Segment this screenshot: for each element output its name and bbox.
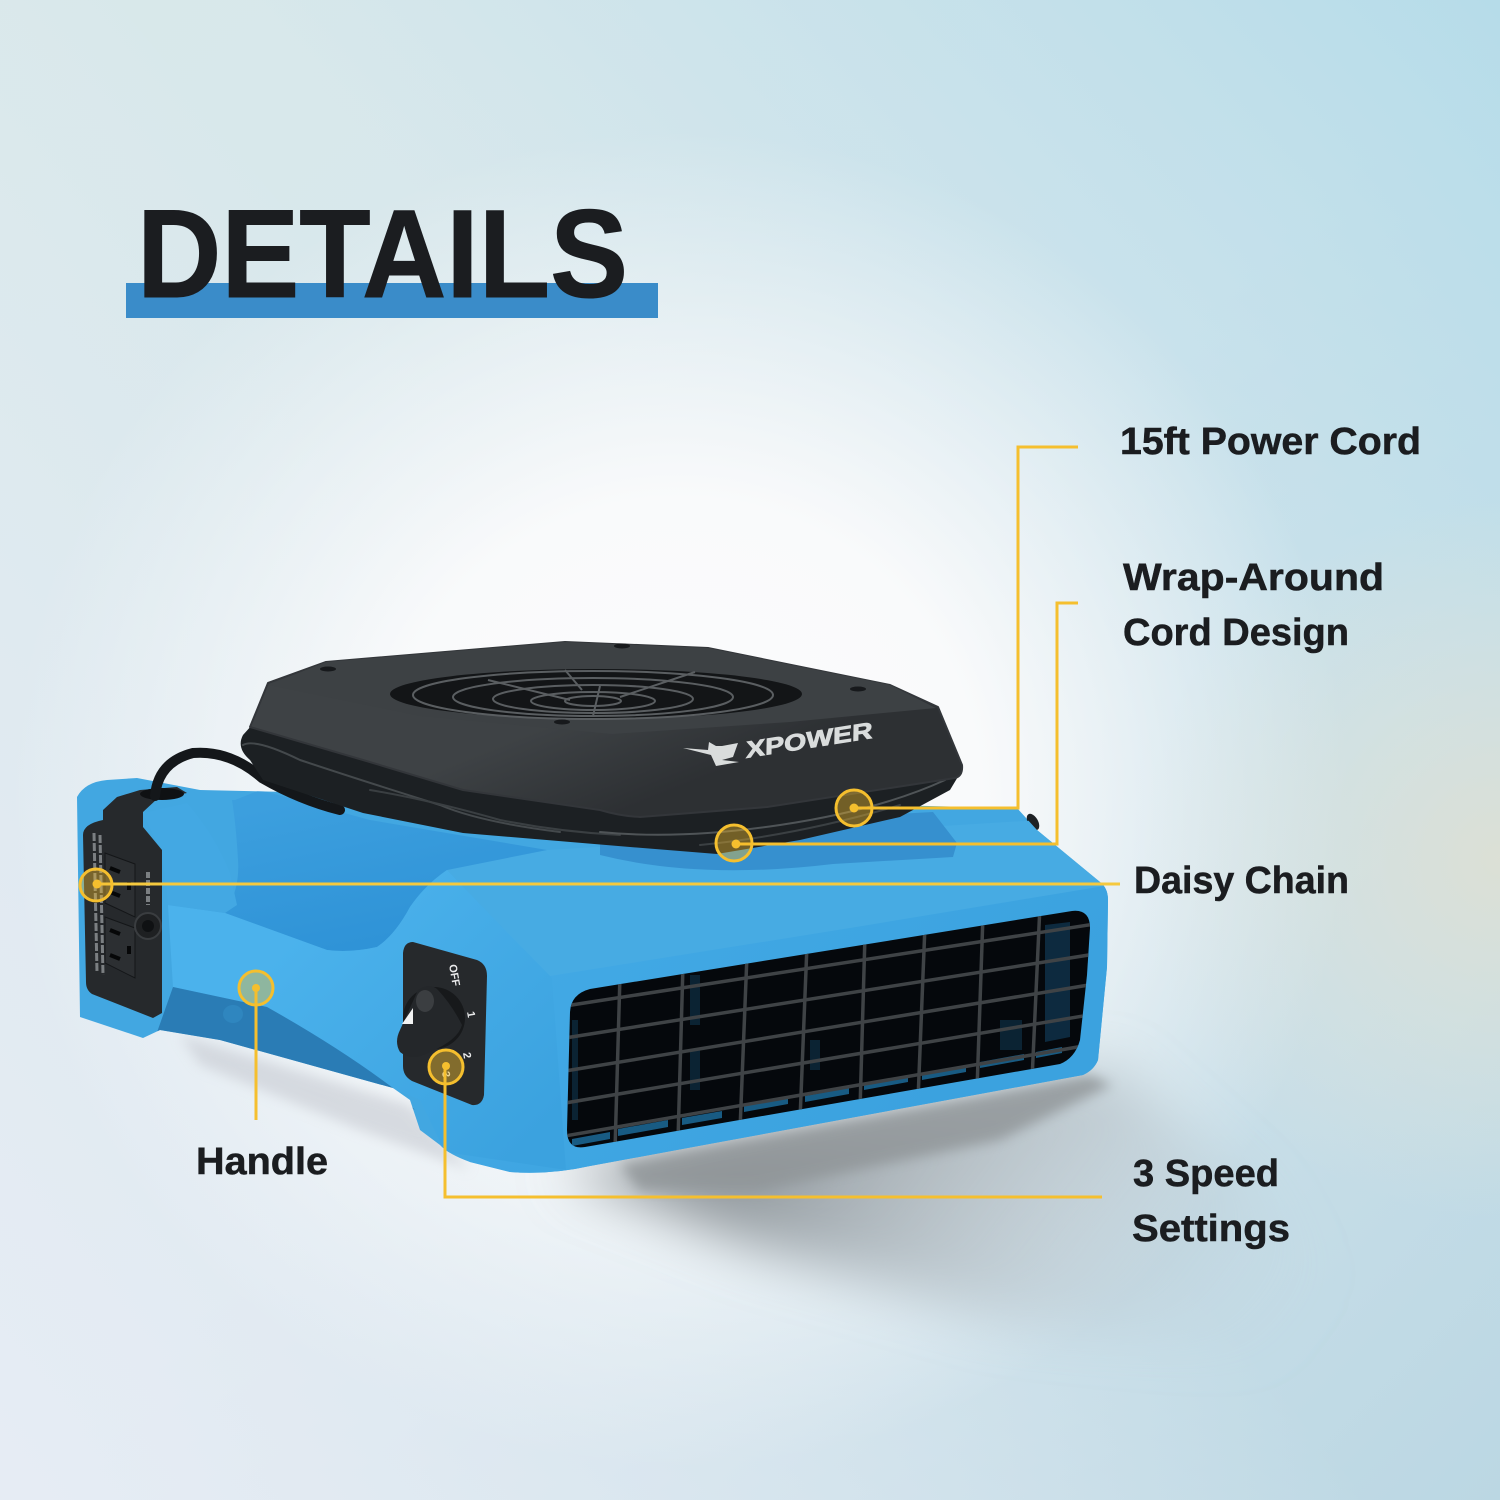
label [1132,1153,1290,1250]
wrapped power cord [155,725,962,854]
panel fine print [94,833,103,975]
cord shadow on top face [600,812,957,870]
front face [445,885,1110,1180]
outlet panel [83,787,187,1018]
left upright highlight [226,894,237,912]
label: Wrap-Around [1123,557,1384,599]
rear knob [1024,812,1042,832]
marker [716,825,752,861]
handle bar [168,870,453,1153]
callout: Handle [196,971,328,1183]
label: Handle [196,1141,328,1183]
leader line [445,1066,1102,1197]
speed dial plate: 3 [439,1070,452,1079]
label [1123,557,1384,654]
product: XPOWER air mover [77,642,1110,1180]
label: 3 Speed [1133,1153,1279,1195]
speed dial plate: 1 [464,1010,477,1019]
cord strands [243,743,945,845]
callout: Daisy Chain [80,860,1349,902]
label: Settings [1132,1208,1290,1250]
power cord inlet [140,788,184,800]
floor shadow of the product [180,1035,1390,1370]
fan opening [390,669,802,719]
marker [429,1050,463,1084]
handle recess [225,790,547,951]
speed dial plate [397,942,487,1105]
interior blue glimpses [572,1047,1062,1146]
XPOWER logo [683,717,873,766]
dial knob [397,986,462,1057]
title text: DETAILS [137,185,628,324]
blue housing [77,778,1110,1180]
mounting bump [223,1005,243,1023]
label: 15ft Power Cord [1120,421,1421,463]
speed dial plate: 2 [460,1051,473,1060]
dial arrow [402,1008,413,1024]
handle underside [155,987,415,1110]
leader line [855,447,1078,808]
label: Cord Design [1123,612,1349,654]
leader line [96,882,1120,886]
logo wordmark: XPOWER [746,717,873,763]
front air outlet grill [565,905,1095,1150]
outlet 2 [105,917,135,978]
top face [1027,820,1104,886]
callout: Wrap-Around Cord Design [716,557,1384,861]
grill bars [565,905,1095,1150]
fan cover [250,642,962,817]
marker [80,869,112,901]
title: DETAILS [126,185,658,324]
cord to inlet [155,753,340,810]
cord bundle [241,725,962,854]
mount holes [320,644,866,724]
marker [239,971,273,1005]
dial base [403,987,465,1049]
title highlight bar [126,283,658,318]
circuit breaker button [135,913,161,939]
leader line [254,988,258,1120]
fan guard [413,670,773,719]
cover top face [268,642,936,734]
label: Daisy Chain [1134,860,1349,902]
callout: 3 Speed Settings [429,1050,1290,1250]
dial labels: OFF [446,963,462,987]
marker [836,790,872,826]
callout: 15ft Power Cord [836,421,1421,826]
logo mark [683,742,739,766]
outlet 1 [105,853,135,917]
leader line [735,603,1078,844]
